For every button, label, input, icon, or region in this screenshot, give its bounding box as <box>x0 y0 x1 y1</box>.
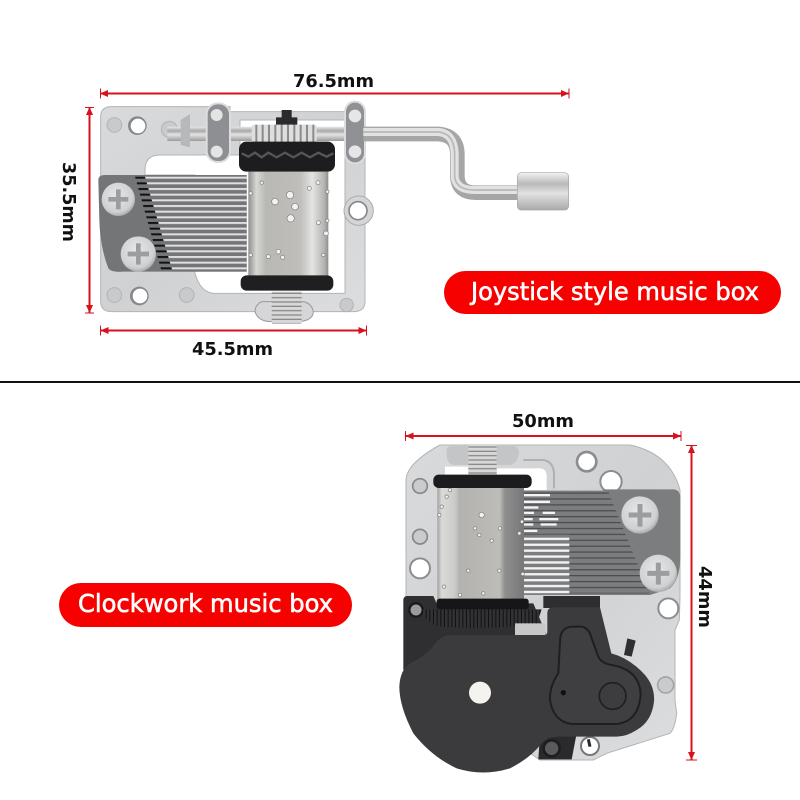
label: joystick style music box <box>444 271 781 314</box>
crank shaft <box>167 127 401 141</box>
threaded post <box>468 445 497 476</box>
comb screw lower <box>640 555 677 592</box>
dimension: 50mm width: 50mm <box>512 412 574 432</box>
comb dark teeth <box>523 492 649 593</box>
worm thread <box>252 125 317 143</box>
dimension: 44mm height: 44mm <box>694 566 714 628</box>
black lower flange <box>437 599 529 609</box>
comb screw upper <box>621 496 659 534</box>
comb light teeth <box>523 535 569 594</box>
crank knob <box>517 173 569 210</box>
label: clockwork music box: Clockwork music box <box>78 589 333 618</box>
dimension: 35.5mm height: 35.5mm <box>58 162 78 242</box>
plate holes <box>107 116 353 312</box>
comb teeth <box>143 177 247 272</box>
left bracket <box>207 103 230 162</box>
black upper flange <box>239 142 335 172</box>
dimension: 76.5mm width: 76.5mm <box>293 72 374 92</box>
plate holes <box>410 451 678 693</box>
housing raised outline <box>550 627 641 724</box>
comb base plate <box>523 489 680 595</box>
housing white hole <box>469 682 491 704</box>
black back frame <box>403 596 547 670</box>
comb light teeth upper pattern <box>523 494 558 532</box>
plastic gear <box>422 609 542 628</box>
wing nut <box>447 446 519 465</box>
section divider <box>0 381 800 383</box>
mounting plate <box>406 445 680 760</box>
shaft clip <box>181 114 190 147</box>
comb base plate <box>98 175 247 272</box>
comb screw upper <box>102 183 135 216</box>
cylinder <box>248 172 329 278</box>
housing small dot <box>561 690 566 695</box>
dimension: 35.5mm height <box>58 107 94 314</box>
dark parts under comb <box>543 596 600 608</box>
plate top slot <box>445 467 547 490</box>
threaded post <box>272 292 302 324</box>
crank rod <box>363 132 520 193</box>
small top gear <box>276 110 297 127</box>
dimension: 50mm width <box>405 412 682 441</box>
dimension: 44mm height <box>686 445 714 760</box>
lever <box>624 638 636 657</box>
crank handle <box>363 132 569 210</box>
lower pin rivet <box>538 733 599 759</box>
black lower flange <box>241 275 333 291</box>
housing round boss <box>599 683 626 709</box>
black housing cover <box>399 607 654 772</box>
comb screw lower <box>121 236 156 272</box>
wing nut <box>255 302 313 322</box>
rivet on back frame <box>409 603 423 617</box>
bottom device: clockwork music box mechanism <box>399 445 680 772</box>
top device: joystick style music box mechanism <box>98 102 401 324</box>
plate raised rim <box>523 460 554 488</box>
label: clockwork music box <box>59 583 352 627</box>
comb slits <box>135 177 173 272</box>
mounting plate <box>101 107 365 312</box>
metal gear behind housing <box>515 623 546 635</box>
side lug with hole <box>344 196 373 225</box>
label: joystick style music box: Joystick style music box <box>469 277 759 306</box>
cylinder <box>437 485 524 602</box>
dimension: 45.5mm width: 45.5mm <box>192 340 273 360</box>
right bracket <box>345 102 365 163</box>
black upper flange <box>433 475 532 488</box>
dimension: 45.5mm width <box>100 326 367 360</box>
dimension: 76.5mm width <box>100 72 570 98</box>
